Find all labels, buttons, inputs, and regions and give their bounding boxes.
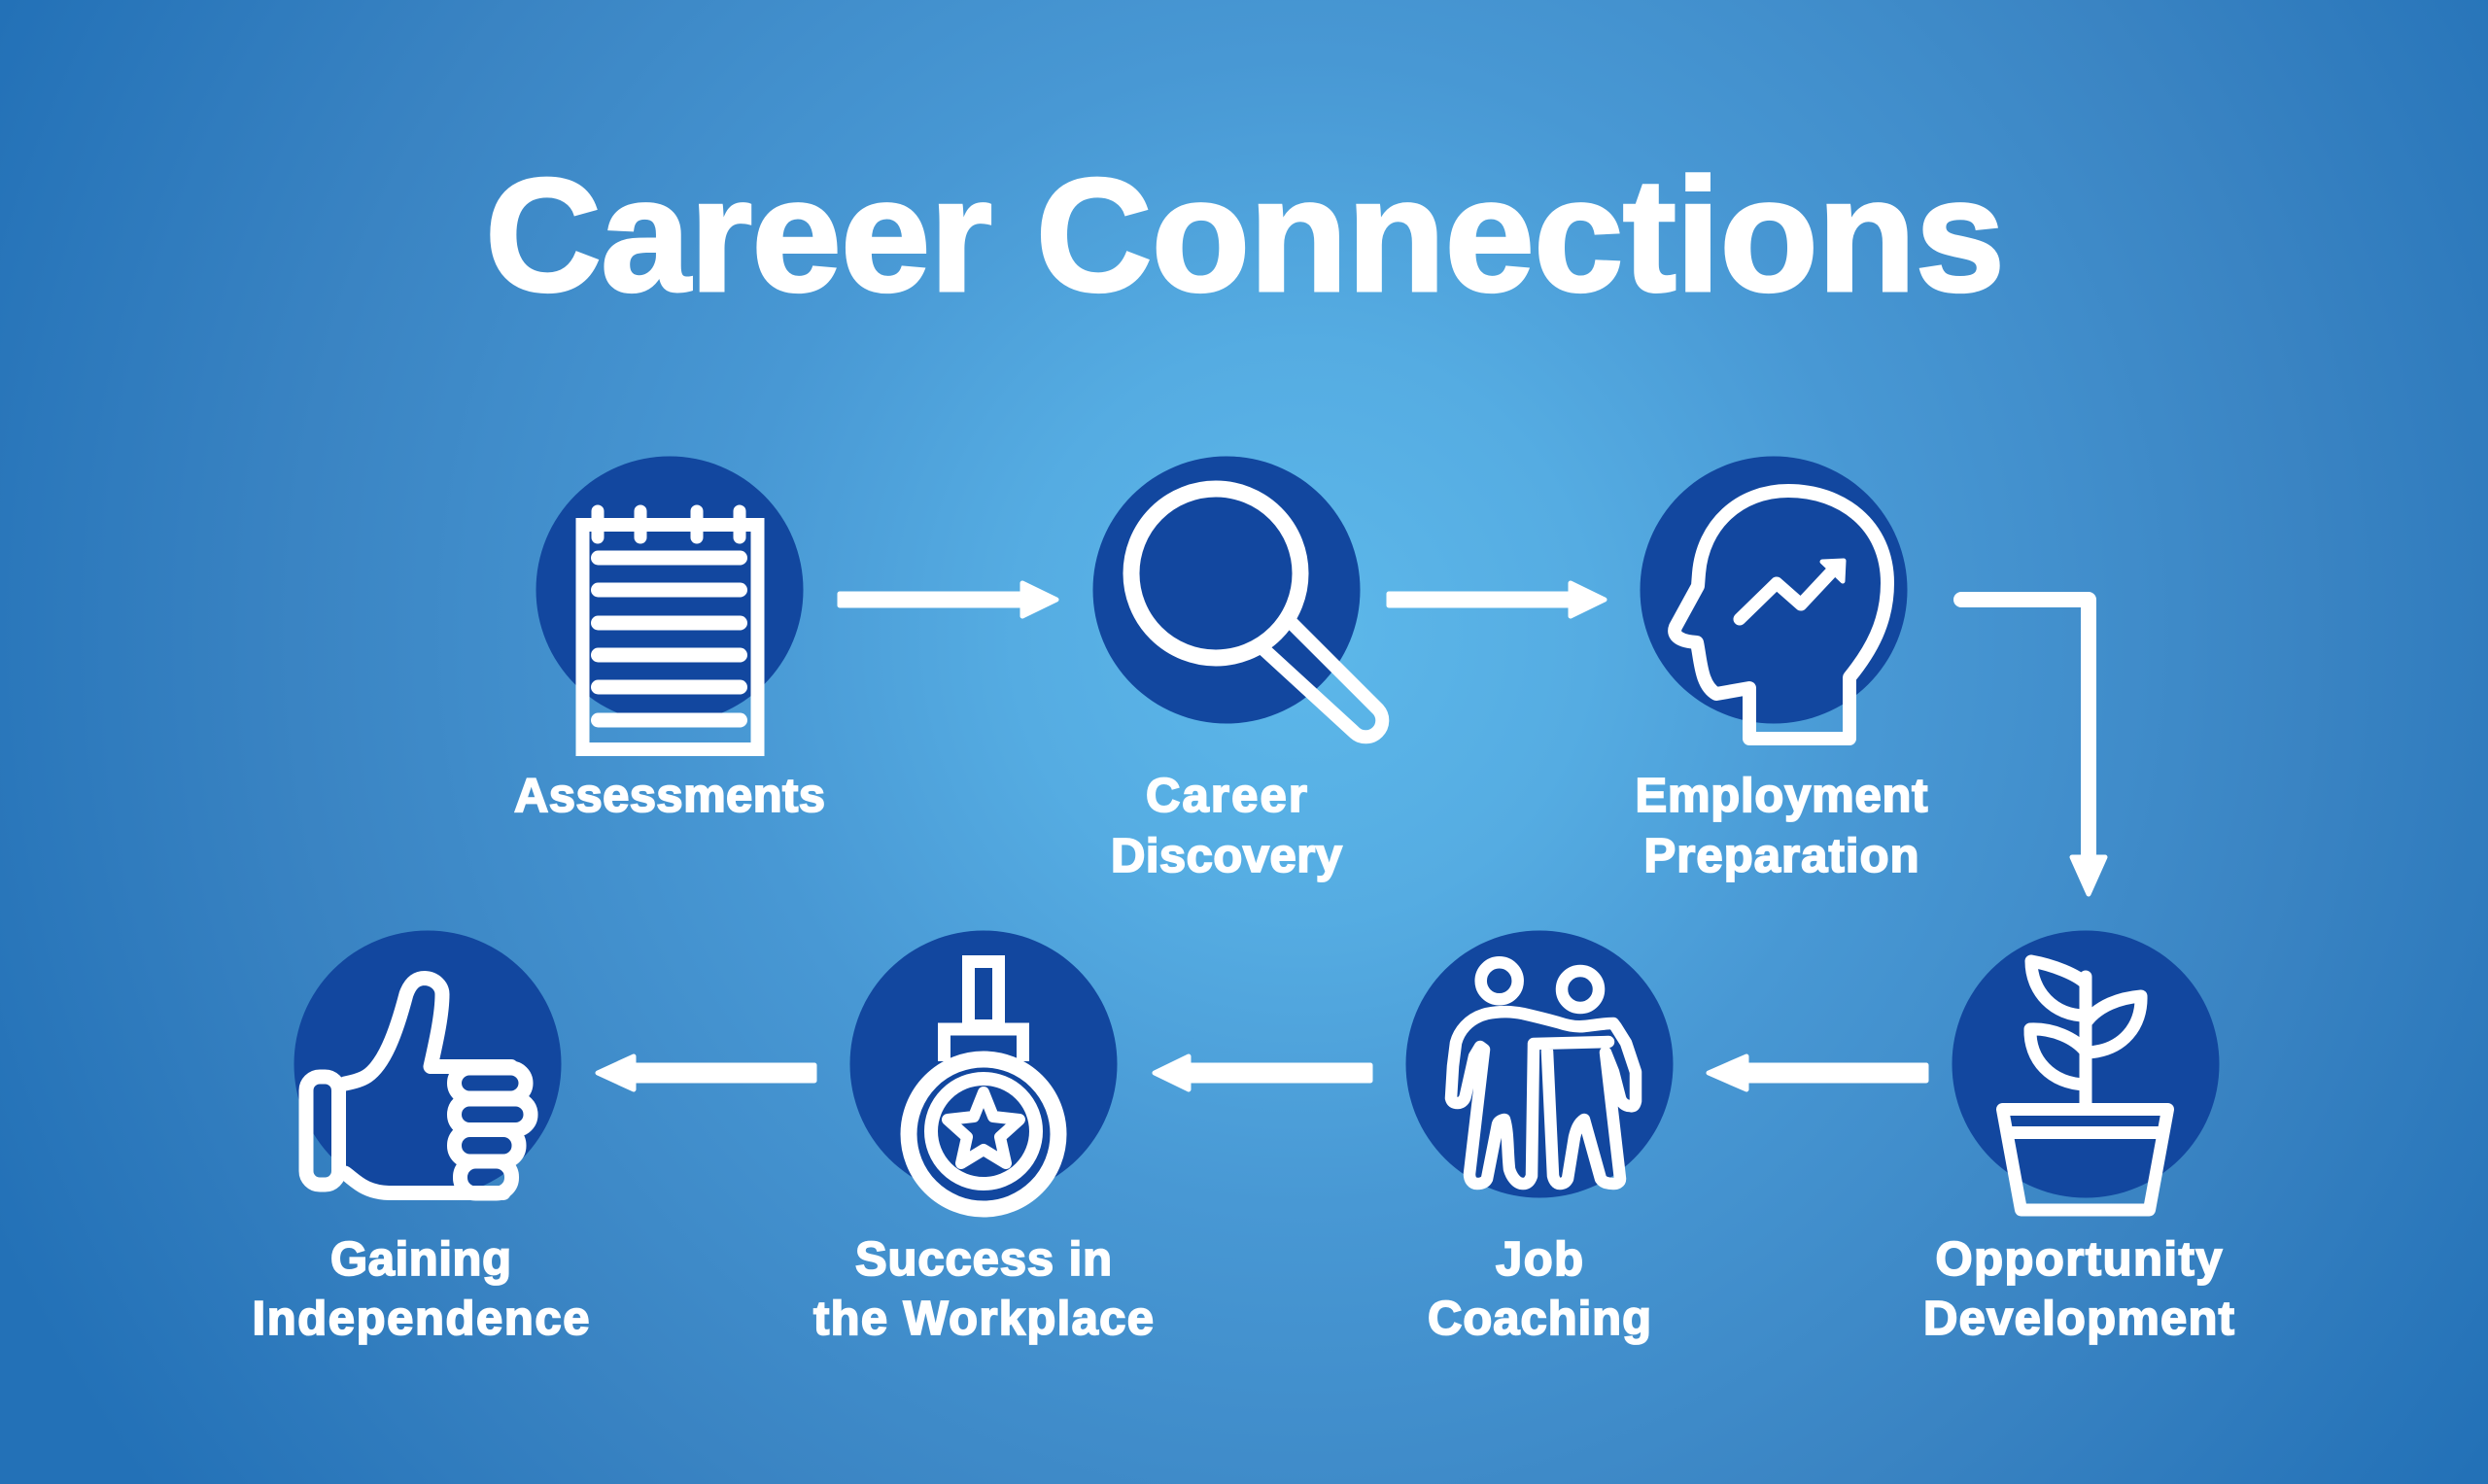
arrow: Employment Preparation to Opportunity Development: [1961, 600, 2105, 894]
arrow: Success in the Workplace to Gaining Independence: [598, 1056, 814, 1089]
step: Employment Preparation: [1635, 457, 1928, 882]
label: Career Discovery: Career: [1146, 770, 1307, 822]
arrow: Opportunity Development to Job Coaching: [1709, 1056, 1926, 1089]
title: Career Connections: [485, 146, 2005, 326]
icon: thumbs up: [294, 931, 562, 1197]
step: Success in the Workplace: [813, 931, 1154, 1345]
icon: potted plant: [1952, 931, 2220, 1210]
step: Success in the Workplace: the Workplace: [813, 1293, 1154, 1345]
step: Employment Preparation: Preparation: [1644, 830, 1918, 882]
label: Job Coaching: Job: [1496, 1233, 1583, 1286]
label: Assessments: Assessments: [514, 770, 825, 822]
step: Career Discovery: [1092, 457, 1382, 882]
label: Opportunity Development: Opportunity: [1936, 1233, 2222, 1286]
icon: magnifying glass: [1092, 457, 1382, 737]
label: Employment Preparation: Employment: [1635, 770, 1928, 822]
icon: notepad: [536, 457, 803, 749]
arrow: Assessments to Career Discovery: [840, 583, 1056, 616]
label: Success in the Workplace: Success in: [855, 1233, 1112, 1286]
step: Job Coaching: [1405, 931, 1674, 1345]
icon: two people: [1405, 931, 1674, 1197]
step: Opportunity Development: [1923, 931, 2234, 1345]
icon: head with growth chart: [1641, 457, 1907, 739]
arrow: Career Discovery to Employment Preparation: [1389, 583, 1605, 616]
label: Gaining Independence: Gaining: [330, 1233, 511, 1286]
step: Assessments: [514, 457, 825, 822]
arrow: Job Coaching to Success in the Workplace: [1155, 1056, 1370, 1089]
icon: medal with star: [849, 931, 1118, 1209]
step: Gaining Independence: [253, 931, 589, 1345]
step: Opportunity Development: Development: [1923, 1293, 2234, 1345]
step: Career Discovery: Discovery: [1111, 830, 1342, 882]
step: Job Coaching: Coaching: [1428, 1293, 1651, 1345]
step: Gaining Independence: Independence: [253, 1293, 589, 1345]
